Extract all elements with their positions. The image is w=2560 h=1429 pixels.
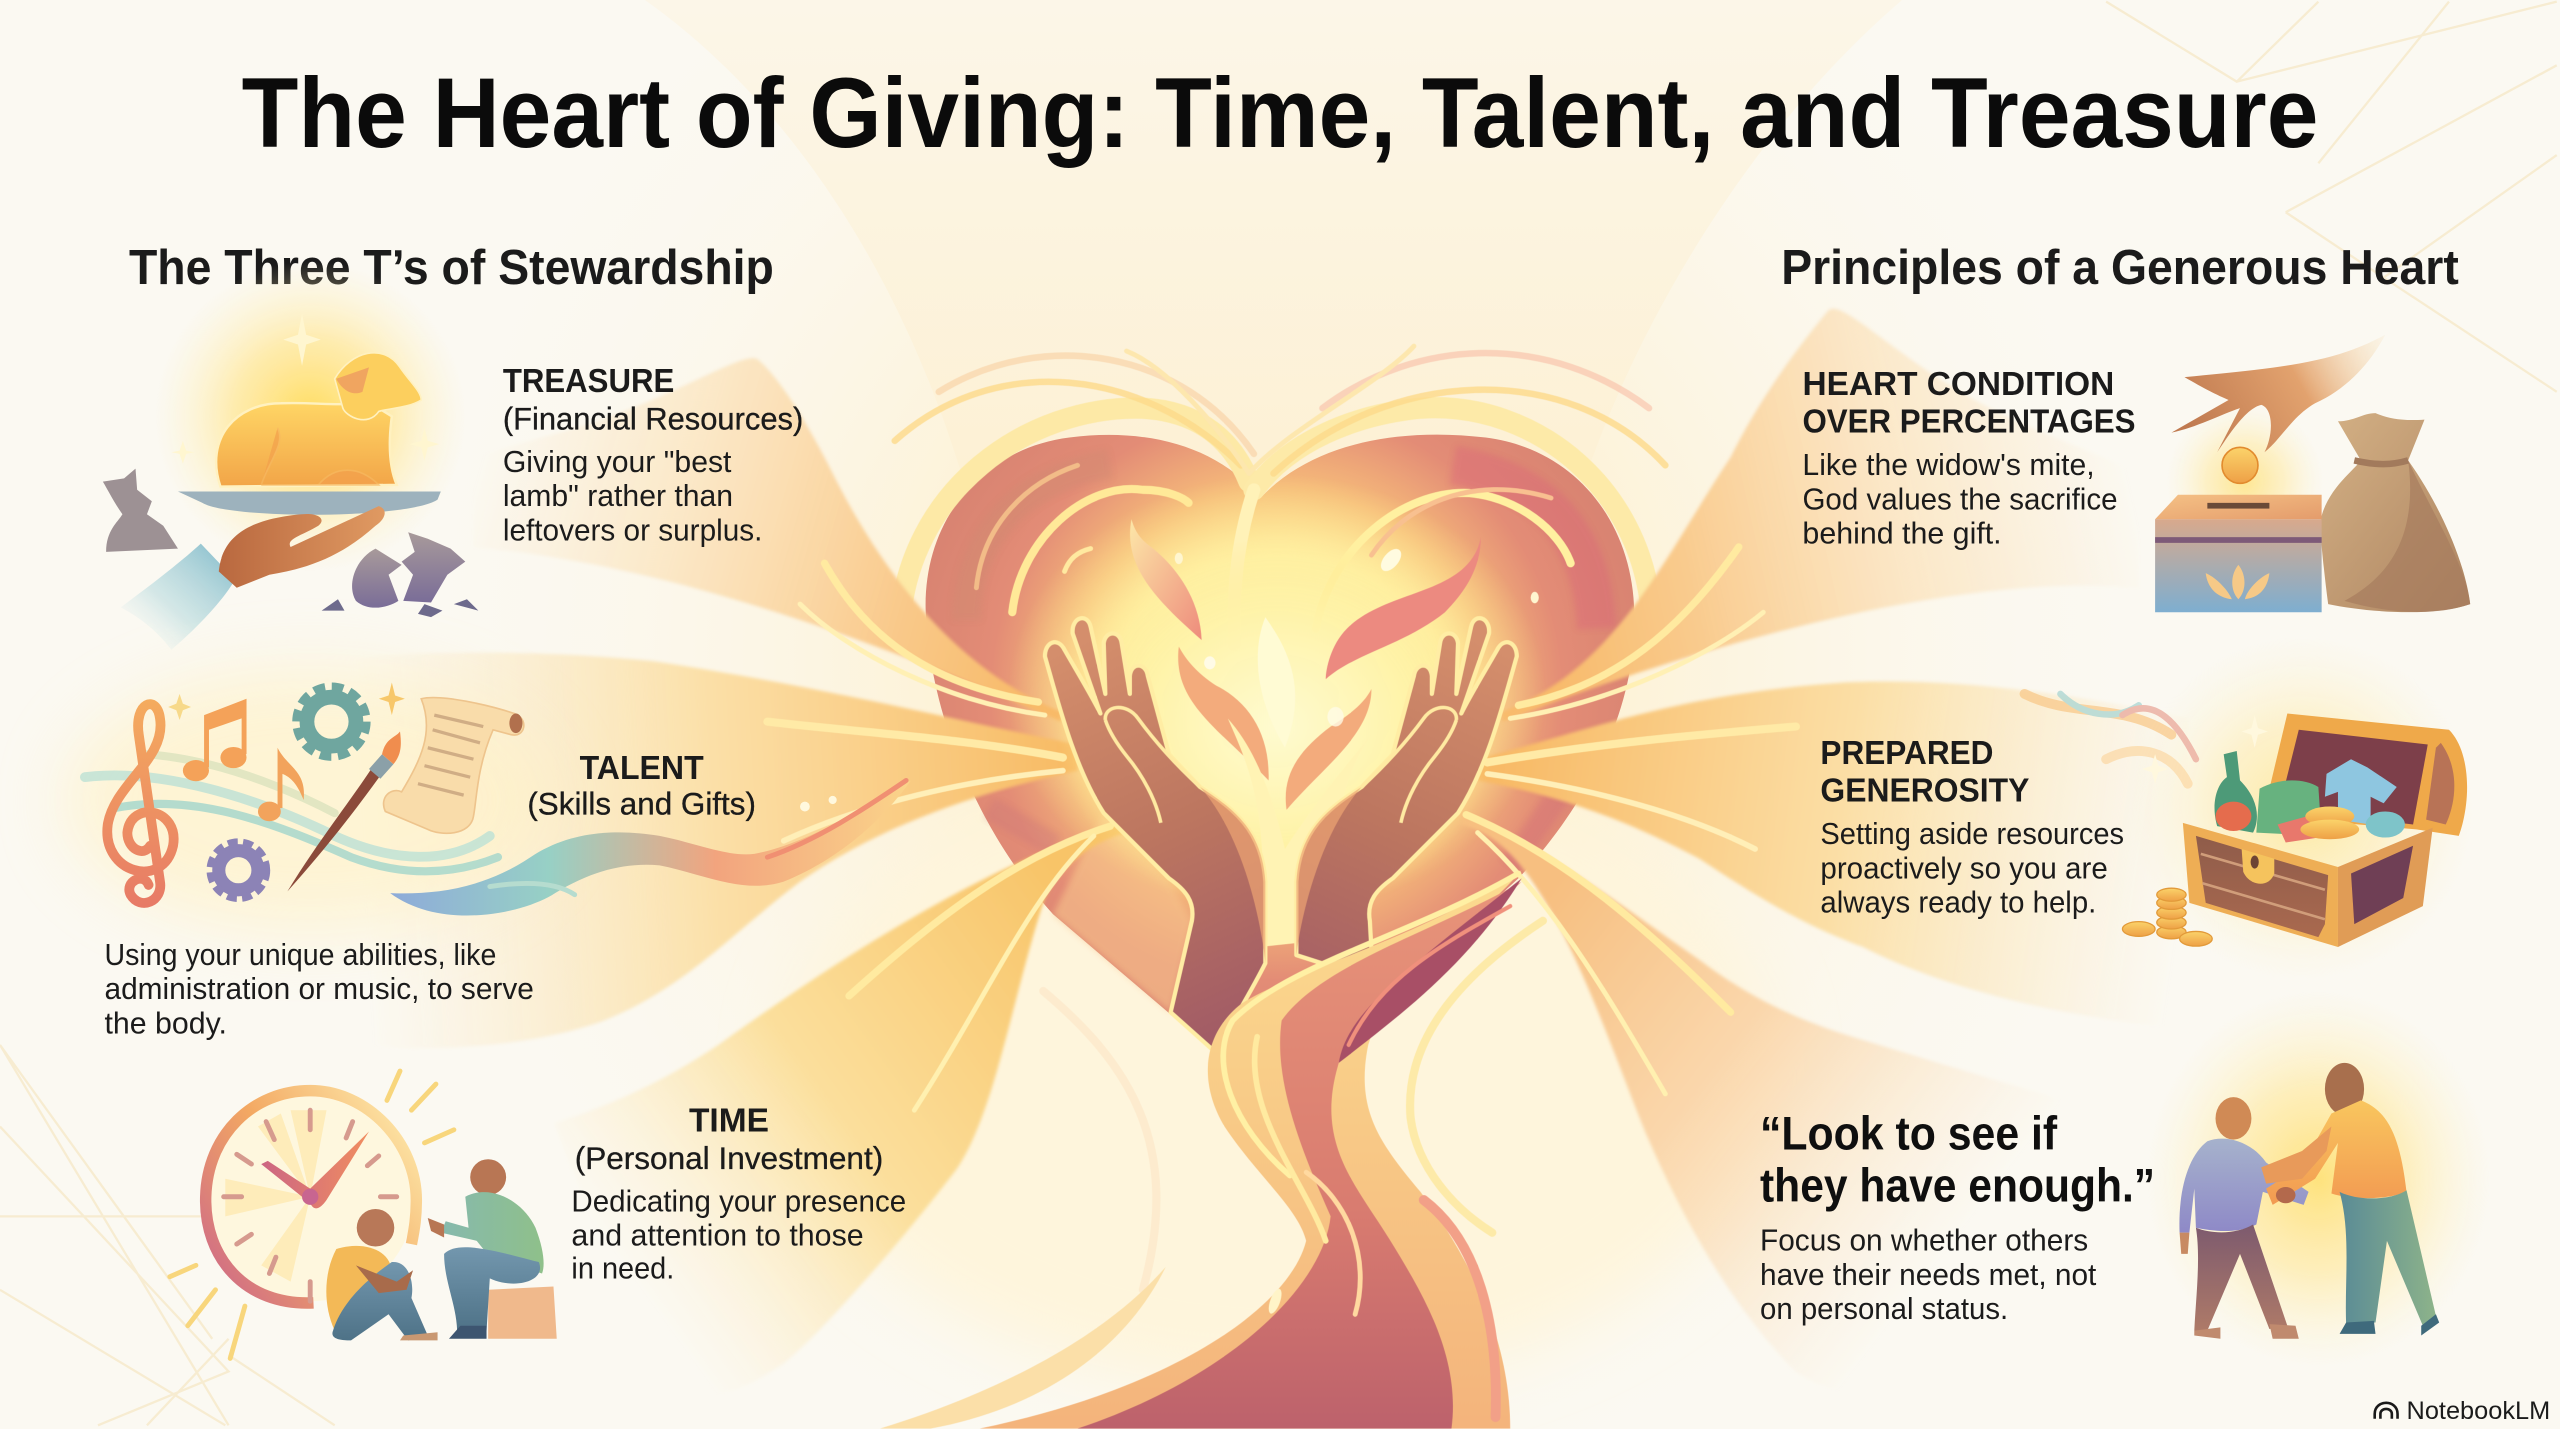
- logo: NotebookLM: NotebookLM: [2407, 1397, 2550, 1425]
- icon: two people helping: [2147, 991, 2490, 1367]
- text: time: [571, 1102, 906, 1285]
- sparkles: [800, 802, 810, 811]
- text: heart condition: behind the gift.: [1802, 518, 2002, 551]
- text: prepared generosity: GENEROSITY: [1820, 773, 2029, 810]
- title: The Heart of Giving: Time, Talent, and Treasure: [242, 58, 2318, 169]
- text: treasure: [503, 363, 803, 547]
- ray: third principle: [1461, 813, 2122, 1398]
- text: talent body: the body.: [104, 1007, 227, 1040]
- pale side flows: [1043, 921, 1543, 1290]
- ray: talent: [212, 653, 1078, 1048]
- right person: [2325, 1063, 2364, 1115]
- text: time: TIME: [689, 1102, 769, 1139]
- text: quote: have their needs met, not: [1760, 1259, 2097, 1292]
- left hand: [1045, 618, 1265, 1053]
- text: treasure: (Financial Resources): [503, 400, 803, 436]
- left person: [2216, 1097, 2251, 1140]
- heart body: [926, 435, 1634, 1102]
- text: quote: Focus on whether others: [1760, 1225, 2088, 1258]
- text: quote: they have enough.”: [1760, 1160, 2155, 1213]
- paintbrush: [287, 767, 380, 891]
- leaf upper left: [1130, 519, 1202, 640]
- music notes: [183, 699, 304, 821]
- text: heart condition: OVER PERCENTAGES: [1802, 404, 2136, 441]
- text: talent body: [104, 939, 534, 1040]
- open hands: [1045, 618, 1517, 1053]
- leaf lower left: [1178, 647, 1269, 780]
- text: treasure: TREASURE: [503, 363, 674, 400]
- wisps: [2024, 694, 2196, 784]
- gear: teal: [297, 687, 366, 756]
- offering box: [2155, 495, 2322, 519]
- text: time: and attention to those: [571, 1220, 864, 1253]
- icon: coin, offering box and bag: [2155, 335, 2470, 612]
- heart inner glow: [1007, 473, 1546, 914]
- text: talent body: administration or music, to serve: [104, 973, 534, 1006]
- heart: [895, 346, 1665, 1102]
- scroll: [384, 698, 524, 833]
- text: talent heading: (Skills and Gifts): [527, 786, 756, 822]
- text: quote: “Look to see if: [1760, 1107, 2057, 1160]
- text: quote: [1760, 1107, 2155, 1326]
- gear: purple: [211, 842, 266, 898]
- rays: principles side: [1461, 309, 2188, 1398]
- ray streaks: [767, 547, 1796, 1110]
- glow behind leaves and hands: [1056, 539, 1497, 914]
- stream streaks: [1223, 873, 1518, 1417]
- stream red core: [1078, 882, 1522, 1429]
- ray: time: [555, 821, 1127, 1396]
- stream outer gold: [980, 870, 1522, 1429]
- person: seated on box: [488, 1287, 557, 1339]
- text: heart condition: Like the widow's mite,: [1802, 449, 2095, 482]
- lid: [2263, 713, 2467, 836]
- treble clef: [107, 704, 174, 903]
- heart swirl strokes: [895, 346, 1665, 645]
- text: treasure: leftovers or surplus.: [503, 514, 762, 547]
- right hand: [1296, 618, 1517, 980]
- icon: open treasure chest: [2024, 637, 2473, 980]
- text: prepared generosity: Setting aside resources: [1820, 818, 2124, 851]
- hand with coin: [2171, 335, 2385, 452]
- text: treasure: Giving your "best: [503, 446, 732, 479]
- text: prepared generosity: [1820, 735, 2124, 920]
- text: prepared generosity: PREPARED: [1820, 735, 1993, 772]
- icon: talent ribbon and tools: [65, 669, 911, 931]
- chest front: [2183, 823, 2338, 947]
- text: heart condition: [1802, 366, 2136, 551]
- icon glow: [65, 669, 555, 931]
- text: time: in need.: [571, 1252, 674, 1285]
- ribbon: [390, 780, 911, 916]
- rays: stewardship side: [212, 358, 1127, 1396]
- central leaves: [1056, 519, 1539, 947]
- ray: prepared generosity: [1478, 682, 2188, 1029]
- bag: [2320, 413, 2470, 612]
- text: heart condition: God values the sacrifice: [1802, 483, 2118, 516]
- text: time: Dedicating your presence: [571, 1185, 906, 1218]
- lock: [2242, 849, 2274, 884]
- text: time: (Personal Investment): [575, 1140, 883, 1176]
- text: talent heading: [527, 750, 756, 822]
- heading: principles: Principles of a Generous Heart: [1781, 241, 2459, 295]
- flowing stream: [880, 870, 1543, 1429]
- lower cream glow: [790, 767, 1770, 1388]
- person: seated on ground: [357, 1209, 394, 1247]
- ray: treasure: [473, 358, 1061, 722]
- icon: lamb on plate: [103, 261, 478, 650]
- centre column: [1228, 718, 1371, 947]
- leaf lower right: [1286, 689, 1371, 810]
- text: prepared generosity: always ready to help.: [1820, 887, 2096, 920]
- text: prepared generosity: proactively so you are: [1820, 852, 2108, 885]
- text: talent heading: TALENT: [580, 750, 704, 787]
- heading: three Ts: The Three T’s of Stewardship: [129, 241, 774, 295]
- stream dark tip: [1339, 878, 1522, 1063]
- text: treasure: lamb" rather than: [503, 480, 733, 513]
- coins: [2122, 888, 2212, 946]
- pale ribbon bottom-left: [880, 1267, 1166, 1429]
- contents: [2215, 751, 2257, 833]
- leaf upper right: [1326, 537, 1481, 679]
- clock: [206, 1092, 415, 1301]
- chest side: [2338, 828, 2433, 947]
- top cream fan: [645, 0, 1902, 539]
- heart lower-left glow: [1053, 813, 1192, 1012]
- centre plume: [1258, 617, 1295, 748]
- text: talent body: Using your unique abilities, like: [104, 939, 496, 972]
- text: quote: on personal status.: [1760, 1293, 2008, 1326]
- glints: [1377, 545, 1405, 575]
- icon: clock and two people: [170, 1071, 557, 1358]
- ray: heart condition: [1502, 309, 2139, 722]
- heart shading: [967, 464, 1597, 865]
- text: heart condition: HEART CONDITION: [1802, 366, 2114, 403]
